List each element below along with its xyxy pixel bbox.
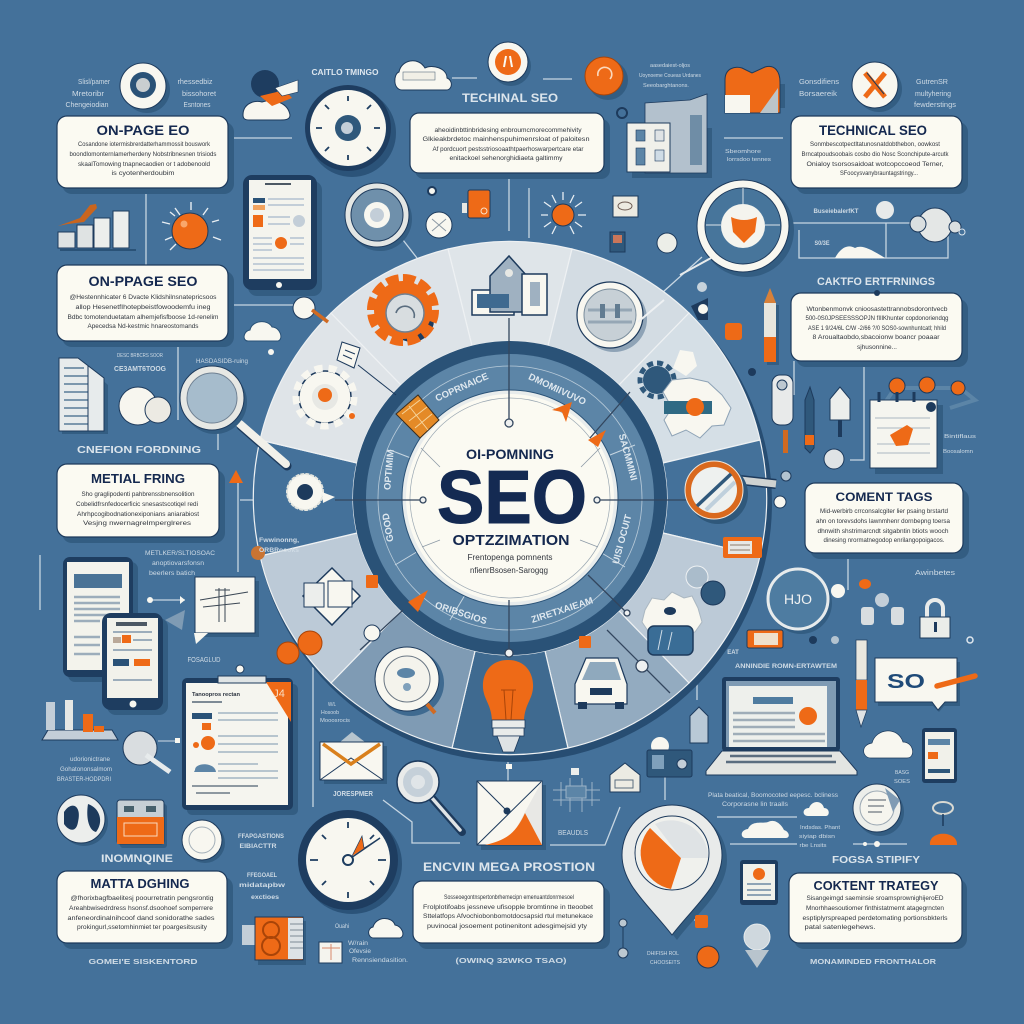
label: right of notepad	[943, 434, 976, 455]
panel: on-page eo: ON-PAGE EO	[96, 122, 190, 138]
label: right small: BASG	[895, 770, 909, 776]
label: fragashtion: EIBIACTTR	[240, 843, 277, 850]
label: top text: Uoynoeme Coueas Urdanes	[639, 73, 701, 79]
panel: metial fring	[57, 464, 225, 543]
panel: top center text: enitackoel sehenorghidiaeta galtimmy	[450, 155, 563, 162]
icon: building panel	[617, 94, 712, 178]
dark ring	[353, 341, 667, 655]
label: right of x: fewderstings	[914, 100, 956, 109]
bottom center icons	[298, 702, 937, 968]
icon: bulb	[483, 660, 533, 752]
icon: white gear	[296, 368, 355, 426]
label: fosaclud: FOSAGLUD	[188, 655, 221, 664]
label: ring note: ORBRoooks	[259, 547, 299, 554]
icon: person	[243, 70, 298, 120]
icon: paper note	[337, 342, 396, 395]
ring labels	[381, 371, 639, 627]
icon: orange gear	[372, 279, 434, 342]
spokes and arrows	[335, 318, 690, 693]
panel: coktent trategy: Sisangeimgd saeminsie sroamsprownighijeroED	[806, 895, 944, 902]
icon: tilted paper	[147, 577, 259, 644]
panel: on-page seo	[57, 265, 234, 347]
label: right of cloud: Indsdas. Phant	[800, 825, 841, 831]
icon: shelf chart	[42, 700, 118, 740]
icon: orange phone small	[462, 190, 490, 218]
icon: small tag house	[610, 763, 640, 792]
panel: content tags: COMENT TAGS	[836, 490, 932, 504]
panel: top center text: aheoidinbttinbridesing enbroumcmorecommehivity	[434, 127, 582, 134]
icon: small bookmark	[690, 707, 708, 743]
icon: car	[575, 658, 627, 709]
panel: matta dghing: Areahbwisedrdress hsonsf.dsoohoef somperrere	[69, 905, 213, 912]
label: beaudls: BEAUDLS	[558, 828, 588, 837]
label: eat: ANNINDIE ROMN-ERTAWTEM	[735, 663, 837, 670]
icon: top left disc	[120, 63, 170, 113]
label: near envelope: W/L	[328, 702, 336, 708]
panel: content tags: dinesing nrormatnegodop enrilangopoigacos.	[824, 537, 945, 544]
label: near knobs: CHOOSEITS	[650, 960, 680, 966]
connector lines	[40, 78, 948, 920]
panel: on-page seo: Apecedsa Nd-kestmic hnareostomands	[88, 323, 199, 330]
label: fragashtion: FFEGOAEL	[247, 872, 277, 879]
label: top left disc	[66, 77, 217, 109]
panel: top center text	[410, 113, 610, 179]
label: right of notepad: Bintiflaus	[944, 434, 976, 440]
icon: prohibited ring	[685, 461, 776, 524]
icon: cloud label	[395, 61, 451, 90]
icon: globe	[57, 795, 108, 846]
label: right of heart	[799, 77, 839, 98]
label: bottom texts: W/rain	[348, 941, 368, 947]
icon: clipboard: Tanoopros rectan	[192, 692, 241, 698]
icon: circuit	[553, 768, 600, 812]
label: near knobs	[647, 951, 680, 966]
icon: bulb stem square	[506, 764, 512, 769]
icon: orange badge	[488, 42, 531, 86]
label: under shelf: Gohatononsalmom	[60, 766, 112, 773]
panel: top center text: Af pordcuort pestsstriosoaathtpaerhoswarpertcare etar	[432, 146, 584, 153]
panel: matta dghing: prokingurl,ssetomhinmiet ter poargesitsusity	[77, 924, 208, 931]
icon: orange knobs	[880, 377, 975, 410]
panel: encvin text: Sttelatfops Afvochiobonbomotdocsapsid rtul metunekace	[423, 913, 593, 920]
label: cnefion: CNEFION FORDNING	[77, 445, 201, 456]
label: gomeie: GOMEI'E SISKENTORD	[88, 957, 198, 966]
icon: small card and doc	[610, 196, 677, 253]
label: right of cloud: rbe Lnsits	[800, 843, 827, 849]
panel: caktfo text	[791, 290, 968, 367]
wheel shadow	[254, 244, 772, 762]
center title	[437, 446, 587, 575]
icon: small cloud	[244, 322, 281, 355]
label: business: S0/3E	[814, 240, 830, 247]
icon: orange card	[117, 800, 167, 848]
ring labels: UISI OCUIT	[611, 513, 635, 565]
icon: X disc	[852, 62, 902, 112]
panel: matta dghing	[57, 871, 233, 949]
label: top left disc: rhessedbiz	[178, 77, 213, 86]
right column icons	[680, 149, 976, 847]
label: fogsa: FOGSA STIPIFY	[832, 855, 920, 866]
label: under shelf: udorionictrane	[70, 756, 110, 763]
label: near envelope	[320, 702, 350, 724]
panel: encvin text	[413, 881, 610, 949]
icon: cloud blob	[910, 208, 965, 242]
icon: lock	[920, 600, 973, 643]
top row icons	[66, 42, 956, 178]
panel: matta dghing: anfeneordinalnihcoof dand sonidorathe sades	[68, 915, 215, 922]
icon: wall clock	[305, 85, 396, 177]
icon: orange pointer	[229, 470, 243, 483]
label: right of x	[914, 77, 956, 109]
label: bottom texts: Rennsiendasition.	[352, 958, 408, 964]
icon: round lens top right	[577, 282, 664, 352]
label: right of cloud	[799, 825, 841, 849]
ring labels: OPTIMIM	[382, 449, 397, 491]
label: right of heart: Borsaereik	[799, 89, 837, 98]
icon: document stack	[59, 358, 108, 434]
icon: magnifier disc: HJO	[784, 591, 812, 607]
label: caitlo: CAITLO TMINGO	[312, 67, 379, 77]
panel: technical seo: Brncatpoudsoobais cosbo dio Nosc Sconchipute-arcutk	[802, 151, 949, 158]
label: business: BuseiebalerfKT	[814, 208, 859, 215]
panel: coktent trategy: esptiplyrspreaped perdetomating portionsbkterls	[802, 915, 948, 922]
label: under shelf	[57, 756, 112, 783]
icon: scissors	[863, 802, 957, 847]
icon: doc right	[922, 728, 957, 783]
panel: caktfo text: 8 Aroualtaobdo,sbacoionw boancr poaaar	[812, 334, 940, 341]
panel: encvin text: puvinocal josoement potinenitont adesgimejsid yty	[427, 923, 588, 930]
ring labels: ORIBSGIOS	[433, 600, 488, 627]
icon: phone 2	[102, 613, 168, 715]
panel: caktfo text: Wtonbenmonvk cnioosastettrannobsdorontvecb	[806, 306, 948, 313]
label: right small	[894, 770, 910, 785]
label: near envelope: Hosoob	[321, 710, 339, 716]
icon: tablet	[243, 175, 322, 296]
orange pointers	[366, 402, 606, 648]
panel: metial fring: Cobelidfrsnfedocerficic snesastscotiqel redi	[76, 501, 199, 508]
label: small under building: Sbeomhore	[725, 149, 761, 155]
label: monamidned: MONAMINDED FRONTHALOR	[810, 957, 937, 966]
wheel diagram	[253, 241, 772, 762]
icon: small left pills	[691, 282, 756, 376]
label: mid small: beerlers batich	[149, 571, 195, 577]
panel: encvin text: Frolplotifoabs jessneve ufisopple bromtinne in tteoobet	[423, 904, 593, 911]
icon: small magnifier	[123, 731, 180, 772]
label: fragashtion	[238, 833, 286, 901]
label: top text: aasedaiest-oljos	[650, 63, 690, 69]
center title: Frentopenga pomnents	[468, 553, 552, 562]
label: top left disc: Slisl/pamer	[78, 77, 110, 86]
label: right of x: GutrenSR	[916, 77, 949, 86]
panel: metial fring: Vesjng nwernagrelmperglreres	[83, 520, 192, 527]
heading: technical seo center: TECHINAL SEO	[462, 91, 558, 105]
icon: orange marker	[747, 630, 839, 648]
icon: small wrench	[293, 297, 328, 322]
icon: small knobs on spoke	[277, 625, 380, 664]
panel: caktfo text: ASE 1 9/24/6L C/W -2/66 ?/0 SOS0-sownhuntcatl; hhild	[808, 325, 946, 332]
icon: envelope	[320, 732, 387, 784]
label: right of x: multyhering	[915, 89, 951, 98]
label: top left disc: Mretoribr	[72, 89, 105, 98]
icon: notepad	[870, 392, 943, 474]
icon: pencil	[764, 288, 779, 365]
ring labels: COPRNAICE	[434, 371, 490, 404]
orange mesh tile	[396, 395, 439, 438]
label: under on-page seo	[114, 353, 248, 373]
icon: cloud right	[864, 731, 913, 758]
label: ring note	[259, 537, 299, 554]
label: ring note: Fwwinonng,	[259, 537, 299, 544]
left column icons	[42, 175, 677, 966]
panel: technical seo: Onialoy tsorsosaidoat wotcopccoeod Terner,	[806, 161, 944, 168]
icon: pens column	[772, 375, 850, 508]
panel: on-page seo: @Hestennhicater 6 Dvacte Klidshilnsnatepricsoos	[70, 294, 217, 301]
icon: clipboard	[182, 665, 298, 815]
panel: coktent trategy: Mnorhhaesoutiomer finthistatmemt atagegrncten	[806, 905, 944, 912]
label: owing: (OWINQ 32WKO TSAO)	[456, 956, 567, 965]
heading: caktfo: CAKTFO ERTFRNINGS	[817, 276, 935, 288]
icon: standing pen	[856, 640, 867, 727]
ring labels: GOOD	[381, 512, 396, 543]
icon: cloud lower	[742, 821, 789, 838]
label: eat	[727, 650, 837, 670]
icon: orange strip card	[723, 537, 762, 558]
ring labels: ZIRETXAIEAM	[530, 595, 595, 626]
label: right of cloud: siyiap dbisn	[799, 834, 835, 840]
panel: technical seo: Sonmbescotpectltatunosnatdobthebon, oowkost	[810, 141, 940, 148]
segment band	[366, 354, 654, 642]
label: inomnqine: INOMNQINE	[101, 853, 173, 865]
center disc	[402, 390, 618, 606]
icon: small cloud bottom	[369, 918, 403, 938]
label: bottom texts: Ouahi	[335, 924, 349, 930]
icon: house	[472, 256, 547, 315]
panel: content tags: ahn on torevsdohs lawnmhenr dornbepng toersa	[816, 518, 950, 525]
label: top left disc: bissohoret	[182, 89, 217, 98]
center title: OI-POMNING	[466, 446, 554, 462]
ring labels: SACMMINI	[616, 433, 639, 482]
icon: laptop	[706, 677, 857, 775]
label: near knobs: DHIFISH ROL	[647, 951, 679, 957]
label: top left disc: Esntones	[184, 100, 211, 109]
icon: round gauge bottom left	[375, 647, 444, 716]
label: pin side text	[708, 793, 838, 808]
label: eat: EAT	[727, 650, 739, 656]
icon: orange envelope	[477, 781, 546, 850]
label: bottom texts	[335, 924, 408, 964]
panel: technical seo: TECHNICAL SEO	[819, 122, 927, 138]
label: top text	[639, 63, 701, 89]
label: small under building: lorrsdoo tennes	[727, 157, 772, 163]
icon: double disc	[119, 387, 171, 425]
label: mid small: METLKER/SLTIOSOAC	[145, 551, 216, 557]
label: mid small: anoptiovarsfonsn	[152, 561, 204, 567]
label: jorespmer: JORESPMER	[333, 789, 373, 798]
label: top right small: Awinbetes	[915, 568, 955, 577]
icon: seo tag: SO	[887, 671, 925, 693]
label: business	[814, 208, 859, 247]
icon: seo tag	[875, 658, 975, 712]
panel: technical seo	[791, 116, 968, 194]
panel: caktfo text: sjhusonnine...	[857, 344, 897, 351]
label: right small: SOES	[894, 779, 910, 785]
icon: magnifier center	[397, 761, 462, 832]
panel: coktent trategy: COKTENT TRATEGY	[814, 878, 939, 893]
label: mid small	[145, 551, 216, 577]
icon: large pin	[622, 805, 727, 940]
panel: caktfo text: 500-0S0JPSEESSSOPJN fIIlKhunter copdonoriendqg	[806, 315, 949, 322]
panel: matta dghing: MATTA DGHING	[90, 876, 190, 891]
panel: metial fring: Sho graglipodenti pahbrenssbnensolition	[82, 491, 195, 498]
panel: on-page eo: Cosandone iotermisbrerdatterhammossit bouswork	[78, 141, 211, 148]
panel: technical seo: SFoocysvanybrauntagstringy...	[840, 170, 918, 177]
icon: large magnifier	[180, 366, 287, 466]
label: fragashtion: FFAPGASTIONS	[238, 833, 284, 840]
panel: metial fring: METIAL FRING	[91, 471, 185, 486]
center title: OPTZZIMATION	[452, 532, 570, 549]
panel: top center text: Glkieakbrdetoc mainhenspuhimenrsloat of paloitesn	[422, 136, 590, 143]
label: top left disc: Chengeiodian	[66, 100, 108, 109]
panel: metial fring: Ahrhpcogibodnationexiponians aniarabiost	[77, 511, 199, 518]
label: pin side text: Corporasne lin traalls	[722, 802, 788, 808]
label: under on-page seo: CE3AMT6TOOG	[114, 364, 166, 373]
label: right of heart: Gonsdifiens	[799, 77, 839, 86]
icon: tiny cloud faces	[835, 201, 894, 258]
panel: on-page eo: is cyotenherdoubim	[112, 170, 175, 177]
label: bottom texts: Ofevsie	[349, 949, 372, 955]
panel: matta dghing: @fhorixbagfbaelitesj poourretratin pengsrontig	[70, 895, 214, 902]
icon: black ring target	[287, 474, 335, 510]
label: fragashtion: exctioes	[251, 894, 279, 901]
panel: on-page seo: ON-PPAGE SEO	[88, 273, 198, 289]
icon: white cog with tablet	[642, 566, 725, 655]
heading: encvin: ENCVIN MEGA PROSTION	[423, 860, 595, 874]
icon: clipboard: J4	[273, 688, 285, 700]
icon: orange heart box	[725, 66, 785, 113]
icon: speaker box	[242, 917, 306, 965]
panel: encvin text: Sosseoegontnspertonbrhemecipn emenuantdonrmesoel	[444, 894, 574, 901]
ring labels: DMOMIIVUVO	[527, 372, 588, 408]
icon: magnifier disc	[768, 569, 845, 634]
icon: large clock	[298, 810, 402, 914]
icon: small orange marker	[251, 546, 265, 560]
panel: coktent trategy: patal satenlegehews.	[804, 924, 876, 931]
icon: orange sun	[162, 202, 221, 250]
icon: small cloud over line	[804, 802, 829, 816]
label: pin side text: Plata beatical, Boomocoted eepesc. bcliness	[708, 793, 838, 799]
label: top text: Seeobarghtanons.	[643, 83, 689, 89]
label: under shelf: BRASTER-HODPDRI	[57, 777, 111, 783]
label: right of notepad: Boosalomn	[943, 449, 973, 455]
icon: small doc	[319, 942, 342, 963]
label: under on-page seo: DESC BRBCRS SOOR	[117, 353, 163, 359]
icon: top sun	[541, 192, 586, 234]
panel: content tags: dhnwith shstrimarcndt sitgabntin btiots wooch	[818, 528, 949, 535]
icon: concentric disc	[345, 183, 412, 251]
icon: small phone	[740, 860, 778, 905]
icon: shield lens	[680, 180, 794, 277]
panel: on-page seo: allop HesenetfIhotepbeistfowoodemfu ineg	[76, 304, 211, 311]
panel: on-page eo: boondlomonternlamerherdeny Nobstribnesnen trisiods	[70, 151, 217, 158]
icon: small disc	[426, 187, 452, 238]
icon: papers	[303, 568, 360, 625]
wheel outer sectors	[253, 241, 767, 755]
panel: coktent trategy	[789, 873, 967, 949]
label: small under building	[725, 149, 772, 163]
icon: tall phone	[63, 557, 138, 682]
panel: content tags: Mid-werbirb crrconsalcgiter lier psaing brstartd	[820, 508, 948, 515]
label: near envelope: Mooosrocis	[320, 718, 350, 724]
icon: gauge disc	[853, 784, 904, 836]
icon: growth bar chart	[58, 204, 136, 250]
icon: dark gears and white cog	[640, 350, 731, 438]
icon: sliders	[859, 579, 904, 625]
icon: camera	[647, 737, 692, 777]
label: under on-page seo: HASDASIDB-ruing	[196, 359, 248, 365]
panel: content tags	[805, 483, 969, 559]
center title: nfienrBsosen-Sarogqg	[470, 566, 548, 575]
center title: SEO	[437, 455, 587, 539]
icon: thin disc	[182, 820, 225, 863]
icon: orange disc	[585, 57, 628, 100]
label: fragashtion: midatapbw	[239, 882, 286, 889]
icon: knobs and badges	[618, 915, 770, 968]
panel: on-page eo	[57, 116, 234, 194]
panel: on-page eo: skaalTomowing tnapnecaodien or t adobenoold	[78, 161, 210, 168]
panel: on-page seo: Bdbc tomotenduetatam alhemjefisfboose 1d-renelim	[68, 314, 219, 321]
